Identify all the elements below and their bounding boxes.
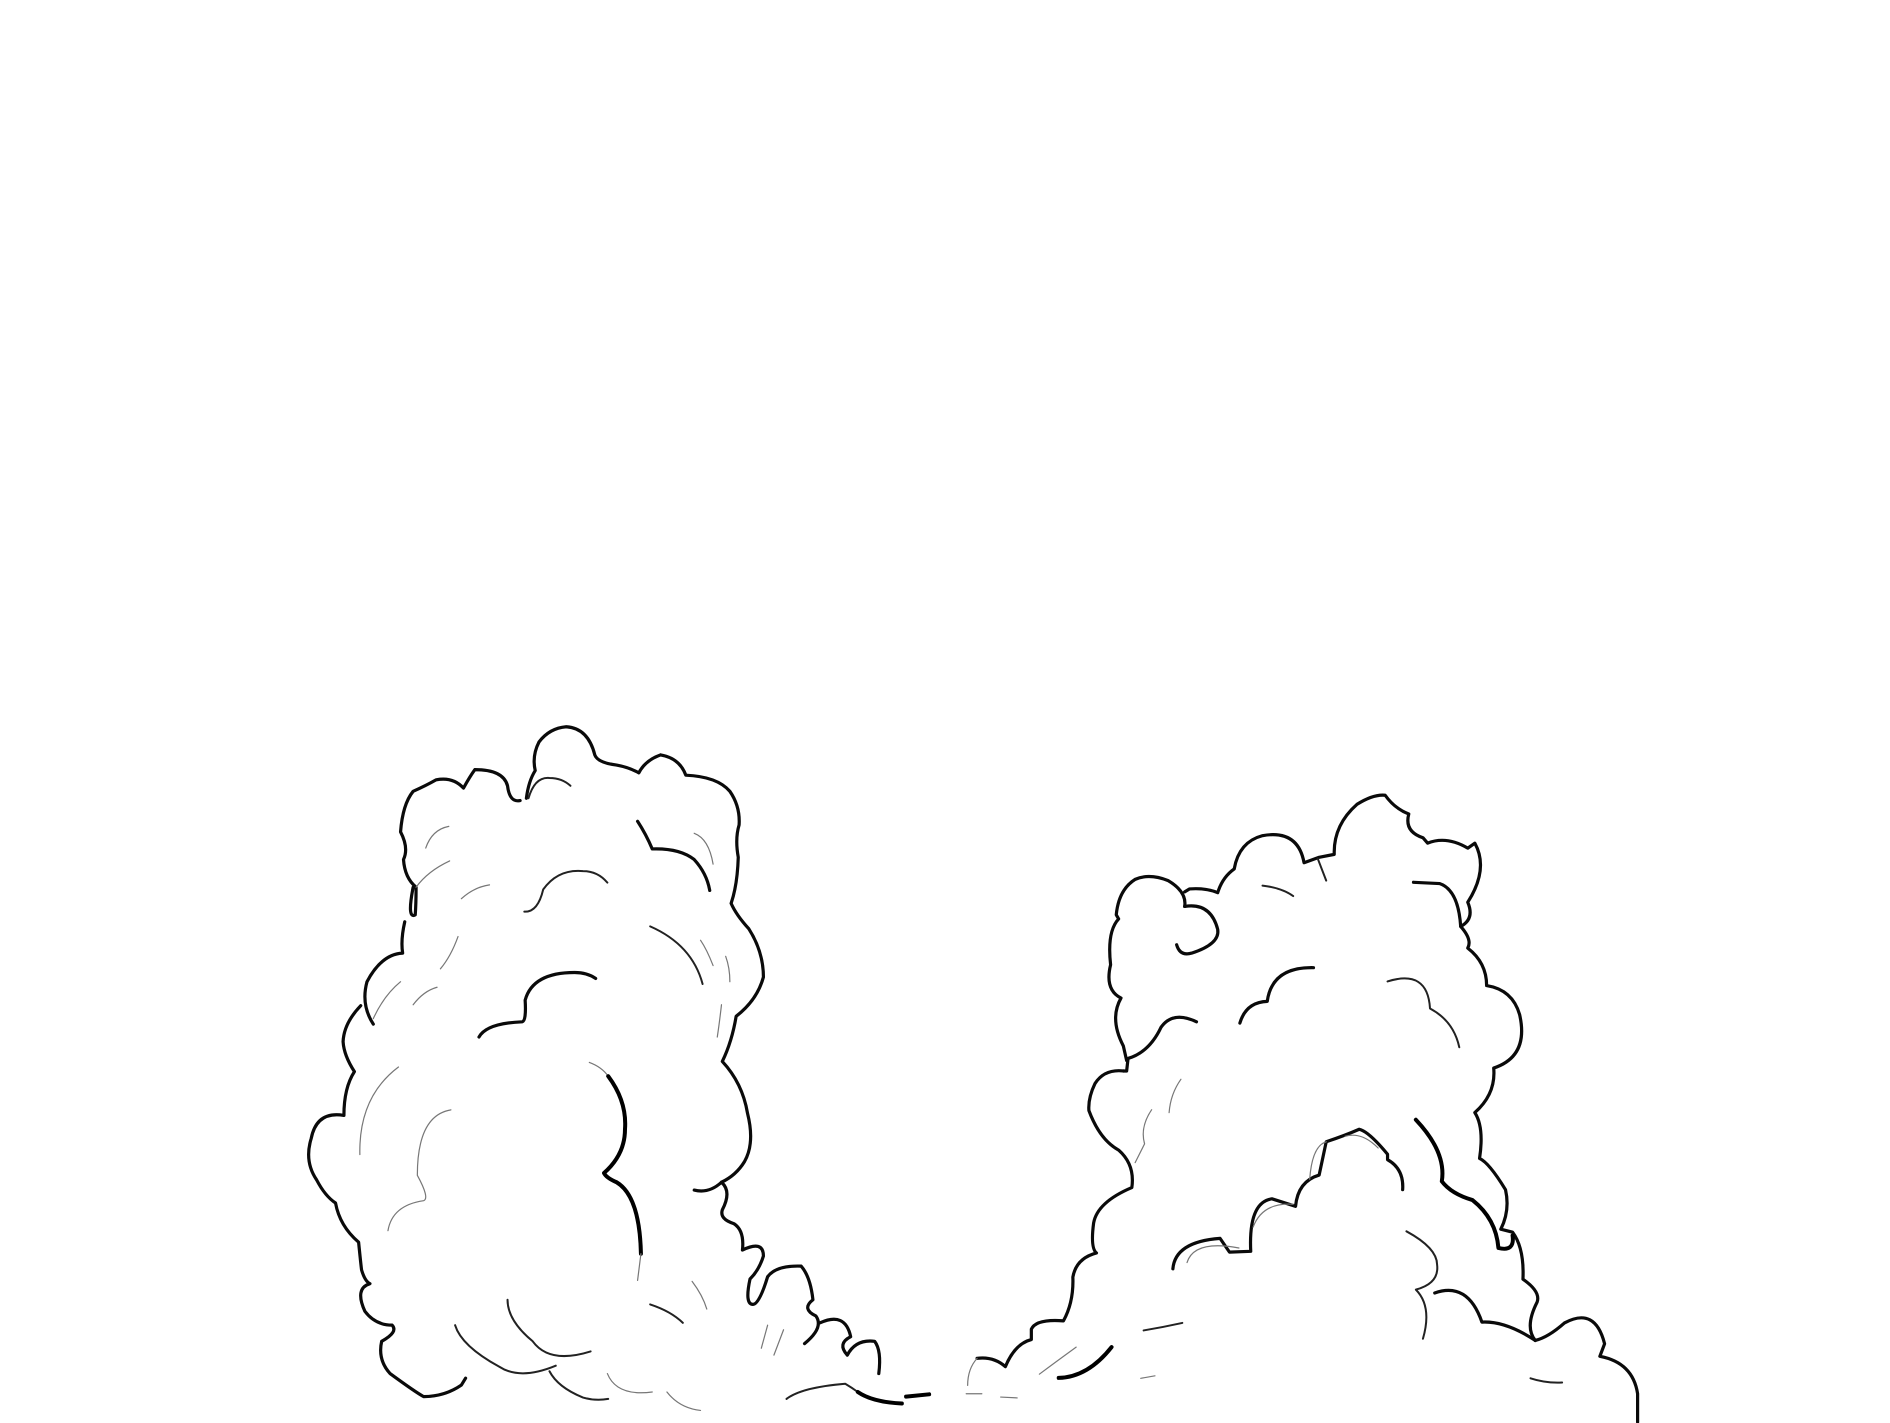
illustration: right cumulus cloud [966, 795, 1638, 1422]
illustration: left cumulus cloud [309, 727, 929, 1410]
